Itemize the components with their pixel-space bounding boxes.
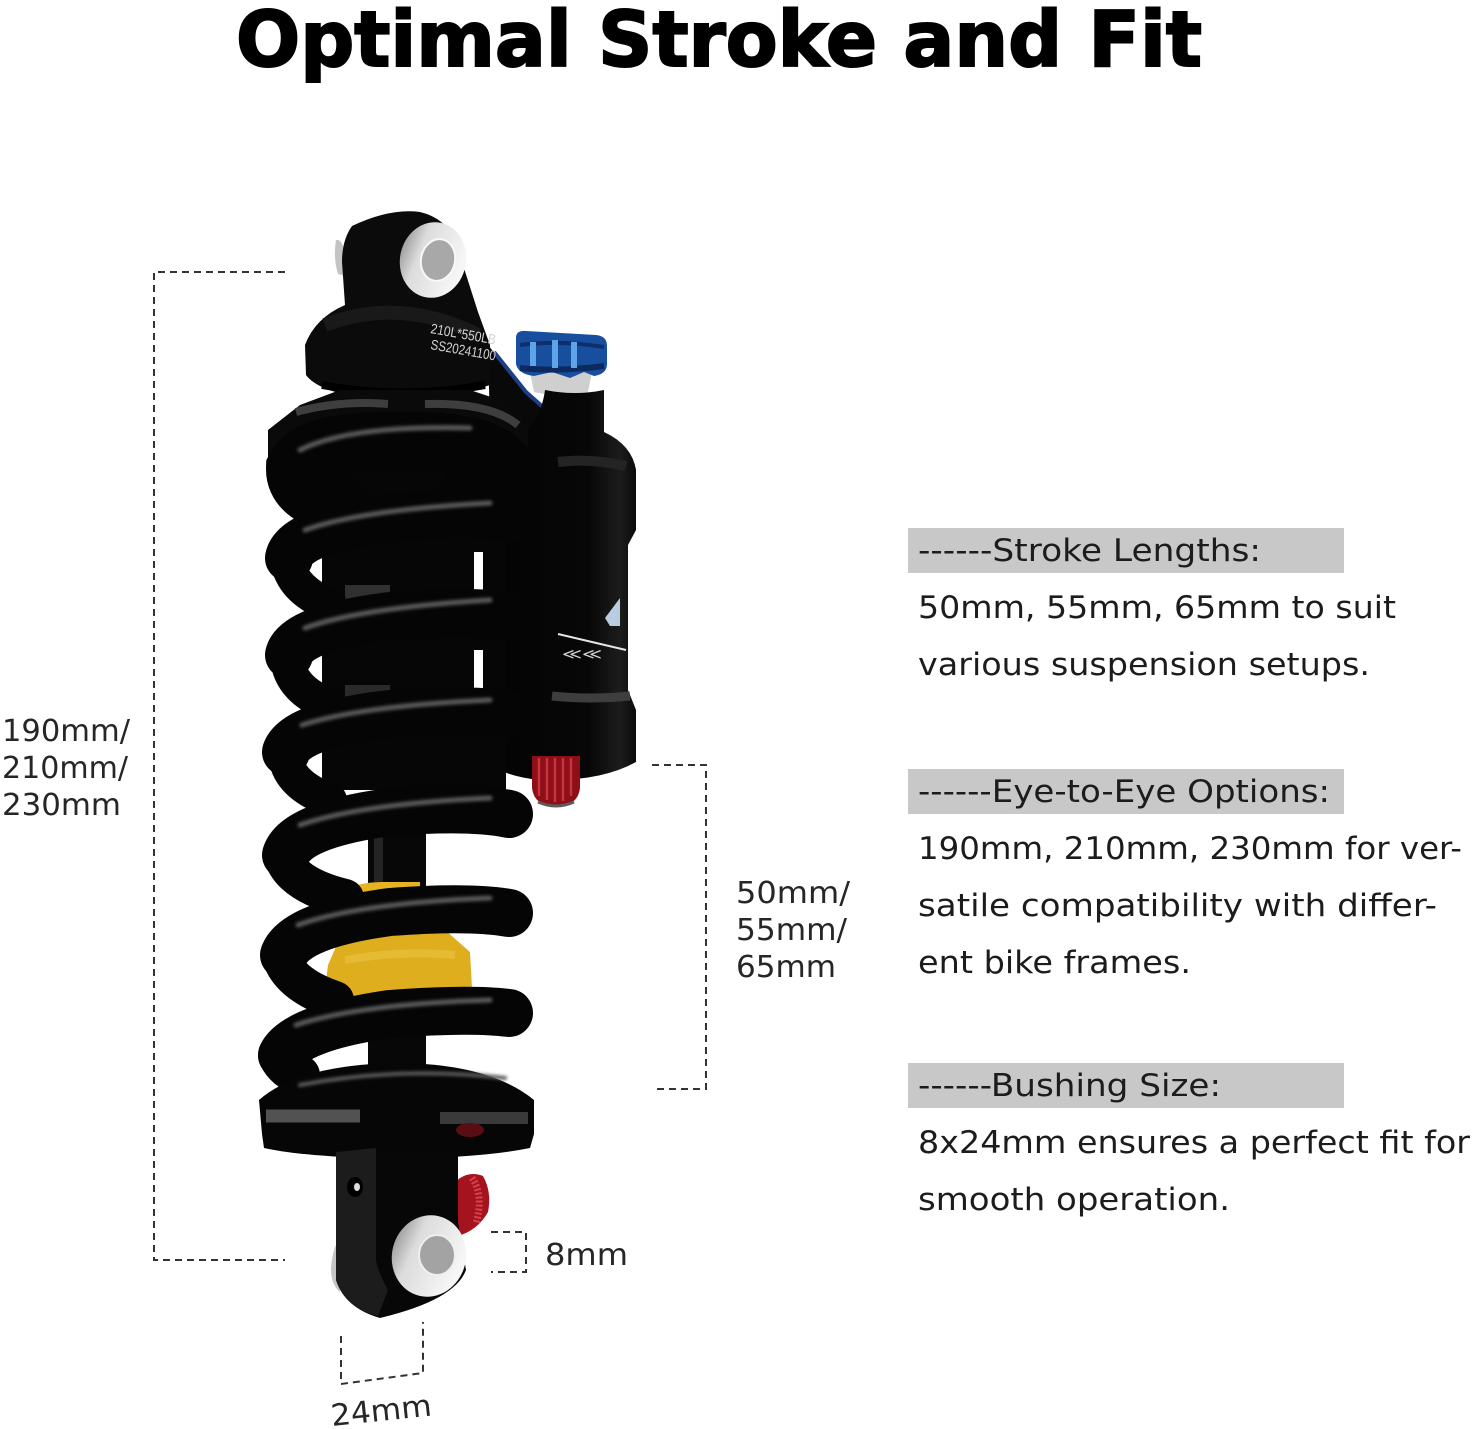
label: stroke lengths: 50mm/ — [736, 876, 851, 911]
text: eye-to-eye description — [918, 831, 1462, 981]
top eyelet mount — [305, 211, 497, 400]
spring coil 2 — [287, 503, 509, 605]
spring coil 3 — [287, 600, 509, 705]
panel: eye-to-eye options — [908, 769, 1462, 981]
lower spring plate and last coil — [259, 1063, 534, 1158]
dimension: bushing width 8mm: 8mm — [545, 1238, 628, 1273]
illustration: coilover rear shock — [259, 211, 636, 1318]
label: stroke lengths: 65mm — [736, 950, 836, 985]
text: stroke lengths description: various suspension setups. — [918, 647, 1370, 683]
heading bar: bushing size: ------Bushing Size: — [918, 1068, 1221, 1104]
icon: blue adjuster knob — [516, 331, 607, 395]
icon: red compression knob — [455, 1174, 489, 1236]
heading bar: eye-to-eye options — [908, 769, 1344, 814]
coil spring — [278, 428, 509, 1075]
text: stroke lengths description — [918, 590, 1396, 683]
central damper body — [322, 440, 506, 790]
text: eye-to-eye description: ent bike frames. — [918, 945, 1191, 981]
heading bar: eye-to-eye options: ------Eye-to-Eye Options: — [918, 774, 1330, 810]
text: eye-to-eye description: 190mm, 210mm, 230mm for ver- — [918, 831, 1462, 867]
text: eye-to-eye description: satile compatibility with differ- — [918, 888, 1437, 924]
icon: top silver bushing — [393, 216, 473, 304]
eye-to-eye dimension bracket — [2, 272, 285, 1260]
text: stroke lengths description: 50mm, 55mm, 65mm to suit — [918, 590, 1396, 626]
panel: stroke lengths — [908, 528, 1396, 683]
text: bushing size description: 8x24mm ensures a perfect fit for — [918, 1125, 1470, 1161]
dimension: bushing width 8mm — [491, 1232, 628, 1273]
dimension: bushing length 24mm — [329, 1322, 433, 1429]
label: stroke lengths: 55mm/ — [736, 913, 848, 948]
text: bushing size description: smooth operation. — [918, 1182, 1230, 1218]
spring coil 5 — [283, 798, 509, 898]
reservoir bridge arm — [488, 345, 556, 445]
label: eye-to-eye lengths — [2, 714, 131, 823]
model text engraving: SS20241100 — [429, 336, 497, 363]
label: eye-to-eye lengths: 230mm — [2, 788, 121, 823]
piston rod — [368, 820, 426, 1070]
model text engraving — [429, 320, 497, 363]
icon: lower silver bushing — [383, 1207, 475, 1305]
stroke dimension bracket — [652, 765, 851, 1089]
heading bar: bushing size — [908, 1063, 1344, 1108]
threaded collar and spring seat — [268, 390, 528, 470]
spring coil 1 — [296, 428, 506, 505]
yellow bump stop — [323, 882, 472, 1006]
reservoir body — [478, 390, 636, 780]
reservoir body: ≪≪ — [562, 645, 602, 663]
lower clevis mount — [331, 1148, 466, 1318]
spring coil 6 — [281, 898, 509, 1000]
panel: bushing size — [908, 1063, 1470, 1218]
label: eye-to-eye lengths: 190mm/ — [2, 714, 131, 749]
heading bar: stroke lengths — [908, 528, 1344, 573]
label: stroke lengths — [736, 876, 851, 985]
label: eye-to-eye lengths: 210mm/ — [2, 751, 129, 786]
text: bushing size description — [918, 1125, 1470, 1218]
spring coil 4 — [285, 700, 509, 800]
model text engraving: 210L*550LB — [429, 320, 497, 347]
heading bar: stroke lengths: ------Stroke Lengths: — [918, 533, 1261, 569]
spring coil 7 — [278, 1000, 509, 1075]
icon: red rebound knob — [532, 756, 580, 807]
